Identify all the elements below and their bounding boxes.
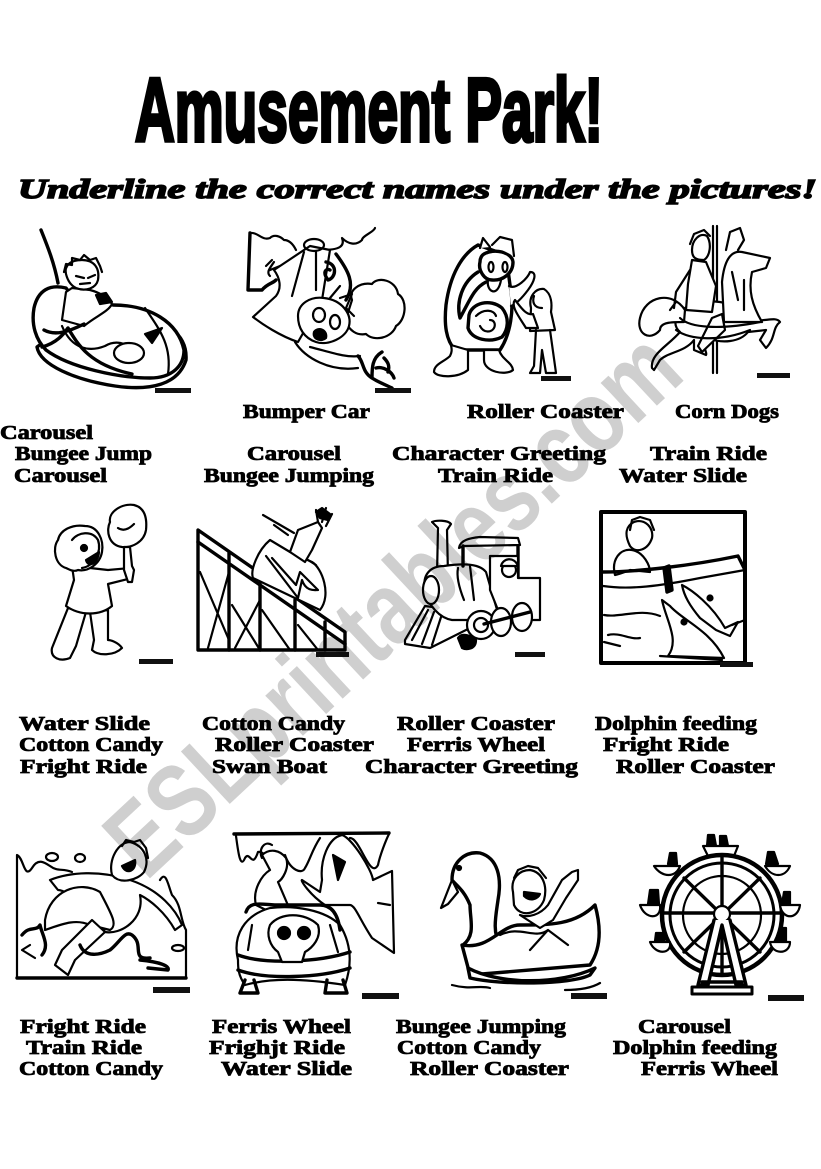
watermark logo: water slide	[153, 987, 190, 993]
labels: row three: Train Ride	[26, 1037, 142, 1059]
labels: row one: Roller Coaster	[467, 401, 624, 423]
labels: row one: Water Slide	[619, 465, 747, 487]
labels: row one: Corn Dogs	[675, 401, 779, 423]
labels: row one: Bungee Jump	[15, 443, 152, 465]
labels: row two: Water Slide	[19, 713, 150, 735]
labels: row one: Carousel	[14, 465, 108, 487]
picture: train	[405, 521, 540, 649]
labels: row two: Roller Coaster	[397, 713, 555, 735]
labels: row three	[19, 1016, 779, 1080]
labels: row two: Cotton Candy	[19, 734, 163, 756]
labels: row two: Cotton Candy	[202, 713, 345, 735]
labels: row two: Roller Coaster	[215, 734, 374, 756]
labels: row two: Fright Ride	[20, 756, 147, 778]
picture: carousel horse	[639, 226, 780, 373]
labels: row two: Fright Ride	[603, 734, 729, 756]
watermark logo: bumper car	[155, 388, 191, 393]
labels: row two: Roller Coaster	[616, 756, 775, 778]
labels: row one: Carousel	[247, 443, 342, 465]
picture: ferris wheel	[640, 835, 800, 994]
labels: row two	[19, 713, 775, 778]
labels: row one	[0, 401, 779, 487]
watermark logo: cow mascot	[541, 376, 571, 381]
labels: row one: Carousel	[0, 422, 94, 444]
labels: row three: Roller Coaster	[410, 1058, 569, 1080]
watermark logo: bungee jumping	[375, 388, 411, 393]
picture: cotton candy girl	[52, 505, 146, 660]
picture: fright ride	[234, 833, 394, 993]
labels: row two: Ferris Wheel	[407, 734, 546, 756]
picture: bumper car	[33, 230, 186, 388]
watermark logo: ferris wheel	[768, 995, 804, 1001]
picture: roller coaster	[198, 508, 345, 650]
picture: bungee jumping	[248, 228, 405, 388]
picture: water slide	[17, 840, 186, 978]
labels: row three: Ferris Wheel	[641, 1058, 779, 1080]
watermark logo: swan boat	[571, 993, 607, 999]
watermark logo: roller coaster	[316, 652, 349, 657]
watermark logo: dolphin feeding	[720, 662, 753, 667]
labels: row two: Swan Boat	[212, 756, 327, 778]
labels: row three: Fright Ride	[20, 1016, 146, 1038]
labels: row one: Train Ride	[438, 465, 553, 487]
watermark logo: train	[515, 652, 545, 657]
labels: row three: Carousel	[638, 1016, 732, 1038]
watermark logo: carousel horse	[757, 373, 790, 378]
labels: row three: Water Slide	[221, 1058, 352, 1080]
labels: row one: Character Greeting	[392, 443, 606, 465]
picture: swan boat	[441, 853, 600, 990]
labels: row one: Bungee Jumping	[204, 465, 374, 487]
labels: row one: Train Ride	[650, 443, 767, 465]
labels: row three: Dolphin feeding	[613, 1037, 777, 1059]
labels: row three: Cotton Candy	[19, 1058, 163, 1080]
labels: row three: Frighjt Ride	[209, 1037, 345, 1059]
picture: cow mascot with girl	[434, 237, 556, 376]
labels: row two: Character Greeting	[365, 756, 578, 778]
labels: row one: Bumper Car	[243, 401, 370, 423]
labels: row three: Bungee Jumping	[396, 1016, 566, 1038]
instruction heading: Underline the correct names under the pictures!	[18, 174, 817, 204]
watermark logo: cotton candy girl	[139, 659, 173, 664]
picture: dolphin feeding	[601, 512, 745, 663]
labels: row three: Cotton Candy	[397, 1037, 541, 1059]
labels: row three: Ferris Wheel	[212, 1016, 352, 1038]
watermark logo: fright ride	[362, 993, 399, 999]
labels: row two: Dolphin feeding	[595, 713, 757, 735]
